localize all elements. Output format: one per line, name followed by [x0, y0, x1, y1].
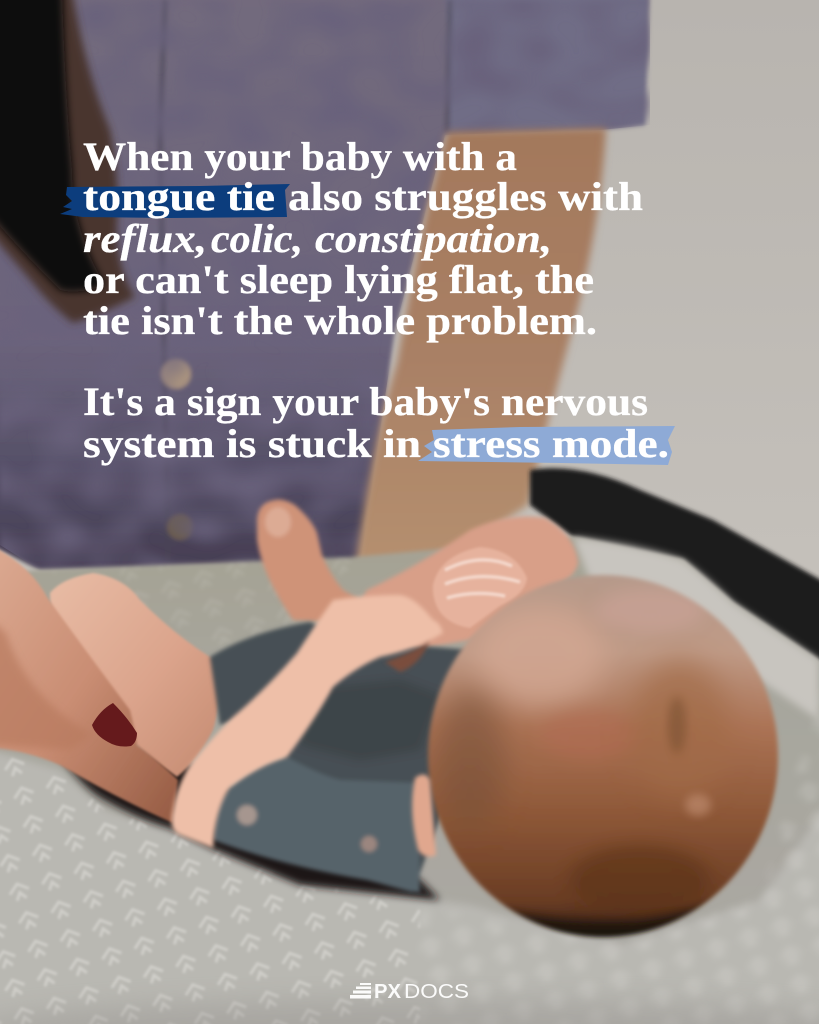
photo: baby ear [412, 774, 436, 857]
nail [92, 703, 137, 746]
logo: PX Docs: PX [374, 981, 402, 1003]
photo: baby head [420, 570, 790, 950]
photo: shadow under adult hand [60, 755, 440, 900]
second paragraph: stress mode. [433, 421, 669, 466]
photo: mattress [0, 537, 819, 1024]
photo: baby onesie [210, 622, 470, 893]
second paragraph: system is stuck in [83, 421, 421, 466]
headline paragraph: tongue tie [83, 174, 275, 219]
logo: PX Docs: DOCS [404, 981, 469, 1003]
highlight: stress mode brush stroke [418, 426, 675, 465]
photo: adult hand and painted nail [0, 545, 178, 823]
second paragraph [83, 379, 669, 466]
headline paragraph: reflux, [83, 216, 207, 261]
logo: PX Docs [350, 981, 469, 1003]
photo: mother's shirt [0, 0, 650, 570]
photo: baby fist [433, 547, 527, 628]
headline paragraph: When your baby with a [83, 134, 517, 179]
photo: mother's arm [352, 128, 606, 590]
headline paragraph: also struggles with [288, 174, 643, 219]
photo: baby arm and hand [172, 595, 443, 848]
photo: hair [0, 0, 135, 323]
photo: crib edge [530, 468, 819, 668]
headline paragraph: tie isn't the whole problem. [83, 298, 597, 343]
highlight: tongue tie brush stroke [60, 184, 290, 218]
headline paragraph: constipation, [315, 216, 552, 261]
icon: stacked bars logo mark [350, 983, 371, 998]
headline paragraph [83, 134, 643, 343]
second paragraph: It's a sign your baby's nervous [83, 379, 648, 424]
headline paragraph: or can't sleep lying flat, the [83, 257, 594, 302]
photo: baby far leg and foot [257, 500, 578, 650]
headline paragraph: colic, [211, 216, 303, 261]
photo: shirt fabric texture [0, 0, 650, 570]
photo: baby near leg [50, 573, 220, 777]
